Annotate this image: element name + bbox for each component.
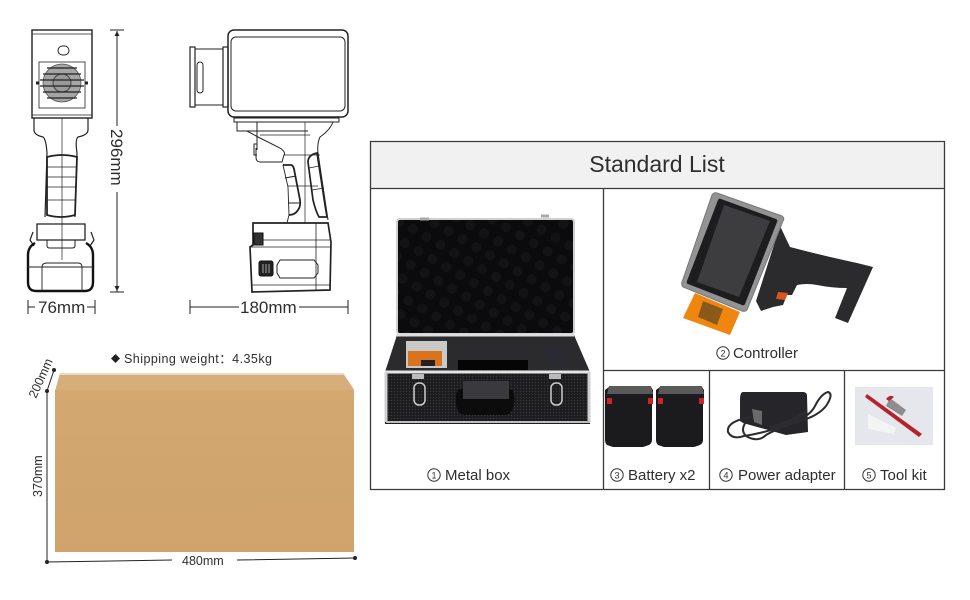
dimension: 180mm: 180mm bbox=[240, 298, 297, 317]
item: metal box bbox=[385, 216, 590, 424]
panel: standard list table bbox=[370, 142, 944, 490]
item: tool kit bbox=[855, 387, 933, 445]
table header: Standard List bbox=[589, 151, 725, 177]
drawing: front view of printer bbox=[28, 30, 94, 291]
dimension: 480mm bbox=[45, 554, 357, 568]
label: battery: 3 bbox=[614, 470, 620, 480]
item: batteries bbox=[605, 386, 704, 447]
item: power adapter bbox=[728, 392, 831, 439]
label: battery: Battery x2 bbox=[628, 467, 696, 484]
table grid bbox=[370, 142, 944, 490]
label: power adapter: Power adapter bbox=[738, 467, 836, 484]
dimension: 296mm bbox=[107, 30, 126, 292]
dimension: 370mm bbox=[31, 389, 49, 561]
label: metal box: Metal box bbox=[445, 467, 511, 484]
label: tool kit: Tool kit bbox=[880, 467, 928, 484]
dimension: 296mm: 296mm bbox=[107, 129, 126, 186]
item: controller bbox=[682, 193, 873, 335]
dimension: 200mm: 200mm bbox=[26, 356, 56, 400]
label: tool kit: 5 bbox=[866, 470, 872, 480]
cardboard box bbox=[55, 373, 354, 552]
label: controller: 2 bbox=[720, 348, 726, 358]
dimension: 76mm: 76mm bbox=[38, 298, 85, 317]
dimension: 480mm: 480mm bbox=[182, 554, 224, 568]
drawing: side view of printer bbox=[190, 30, 348, 292]
table header bbox=[370, 142, 944, 188]
dimension: 370mm: 370mm bbox=[31, 455, 45, 497]
shipping weight label: Shipping weight：4.35kg bbox=[124, 352, 272, 366]
dimension: 180mm bbox=[190, 298, 348, 317]
label: metal box: 1 bbox=[431, 470, 437, 480]
label: power adapter: 4 bbox=[723, 470, 729, 480]
label: controller: Controller bbox=[733, 345, 798, 362]
